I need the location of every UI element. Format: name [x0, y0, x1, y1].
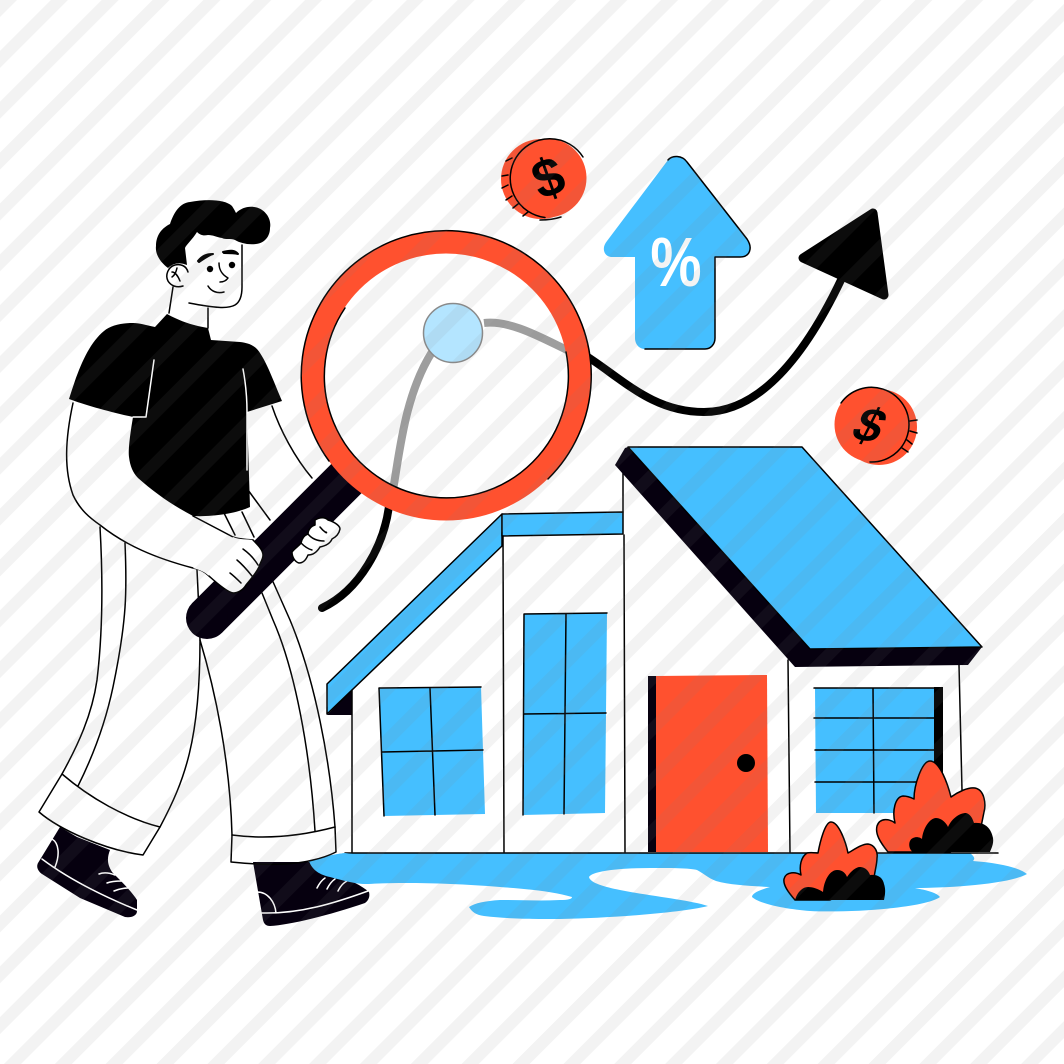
hand right — [292, 518, 340, 563]
arm right — [272, 406, 312, 478]
upper black curve segment — [580, 280, 841, 412]
puddle over right shoe — [309, 853, 400, 884]
face outline — [189, 245, 242, 307]
neck — [169, 287, 208, 328]
lower black curve segment — [322, 506, 389, 608]
icon: top dollar coin — [501, 138, 586, 220]
main roof underside — [615, 447, 982, 667]
right window — [814, 687, 943, 813]
t-shirt — [69, 314, 282, 516]
shoe left — [37, 827, 137, 917]
arm left — [67, 403, 229, 592]
main roof — [628, 447, 982, 649]
dollar sign: $ — [844, 397, 896, 454]
gray curve inside lens — [393, 323, 567, 490]
middle roof band — [502, 512, 623, 536]
percent sign: % — [650, 224, 702, 301]
inner arm line — [193, 516, 253, 540]
middle window — [523, 613, 607, 815]
shirt seams — [133, 360, 247, 470]
rear bush — [877, 761, 993, 852]
ring outlines — [301, 231, 591, 498]
rear bush shadow — [909, 813, 993, 852]
lens bubble — [424, 304, 482, 362]
ground line — [345, 852, 998, 854]
door — [648, 675, 768, 852]
person — [37, 200, 400, 926]
puddle — [309, 853, 1027, 919]
eyes — [207, 266, 213, 272]
hand left — [193, 537, 263, 593]
magnifier handle — [186, 474, 351, 639]
dollar sign: $ — [524, 145, 573, 211]
eyebrows — [198, 251, 238, 262]
head — [156, 200, 270, 307]
left roof shadow — [327, 690, 352, 715]
nose and mouth — [208, 263, 228, 293]
left window — [379, 687, 485, 816]
trousers — [39, 490, 336, 864]
front bush shadow — [795, 867, 885, 900]
door knob — [737, 754, 755, 772]
magnifying glass — [301, 231, 591, 509]
hair — [156, 200, 270, 268]
house — [327, 447, 998, 900]
icon: growth arrowhead — [803, 213, 884, 295]
wall lines — [352, 473, 962, 852]
trend line — [322, 280, 841, 608]
front bush — [784, 822, 885, 900]
shoe right — [253, 862, 369, 926]
left roof slope — [327, 514, 502, 714]
orange ring — [312, 242, 580, 509]
ear — [167, 265, 188, 287]
icon: right dollar coin — [834, 387, 917, 465]
icon: percent up arrow — [604, 156, 750, 349]
